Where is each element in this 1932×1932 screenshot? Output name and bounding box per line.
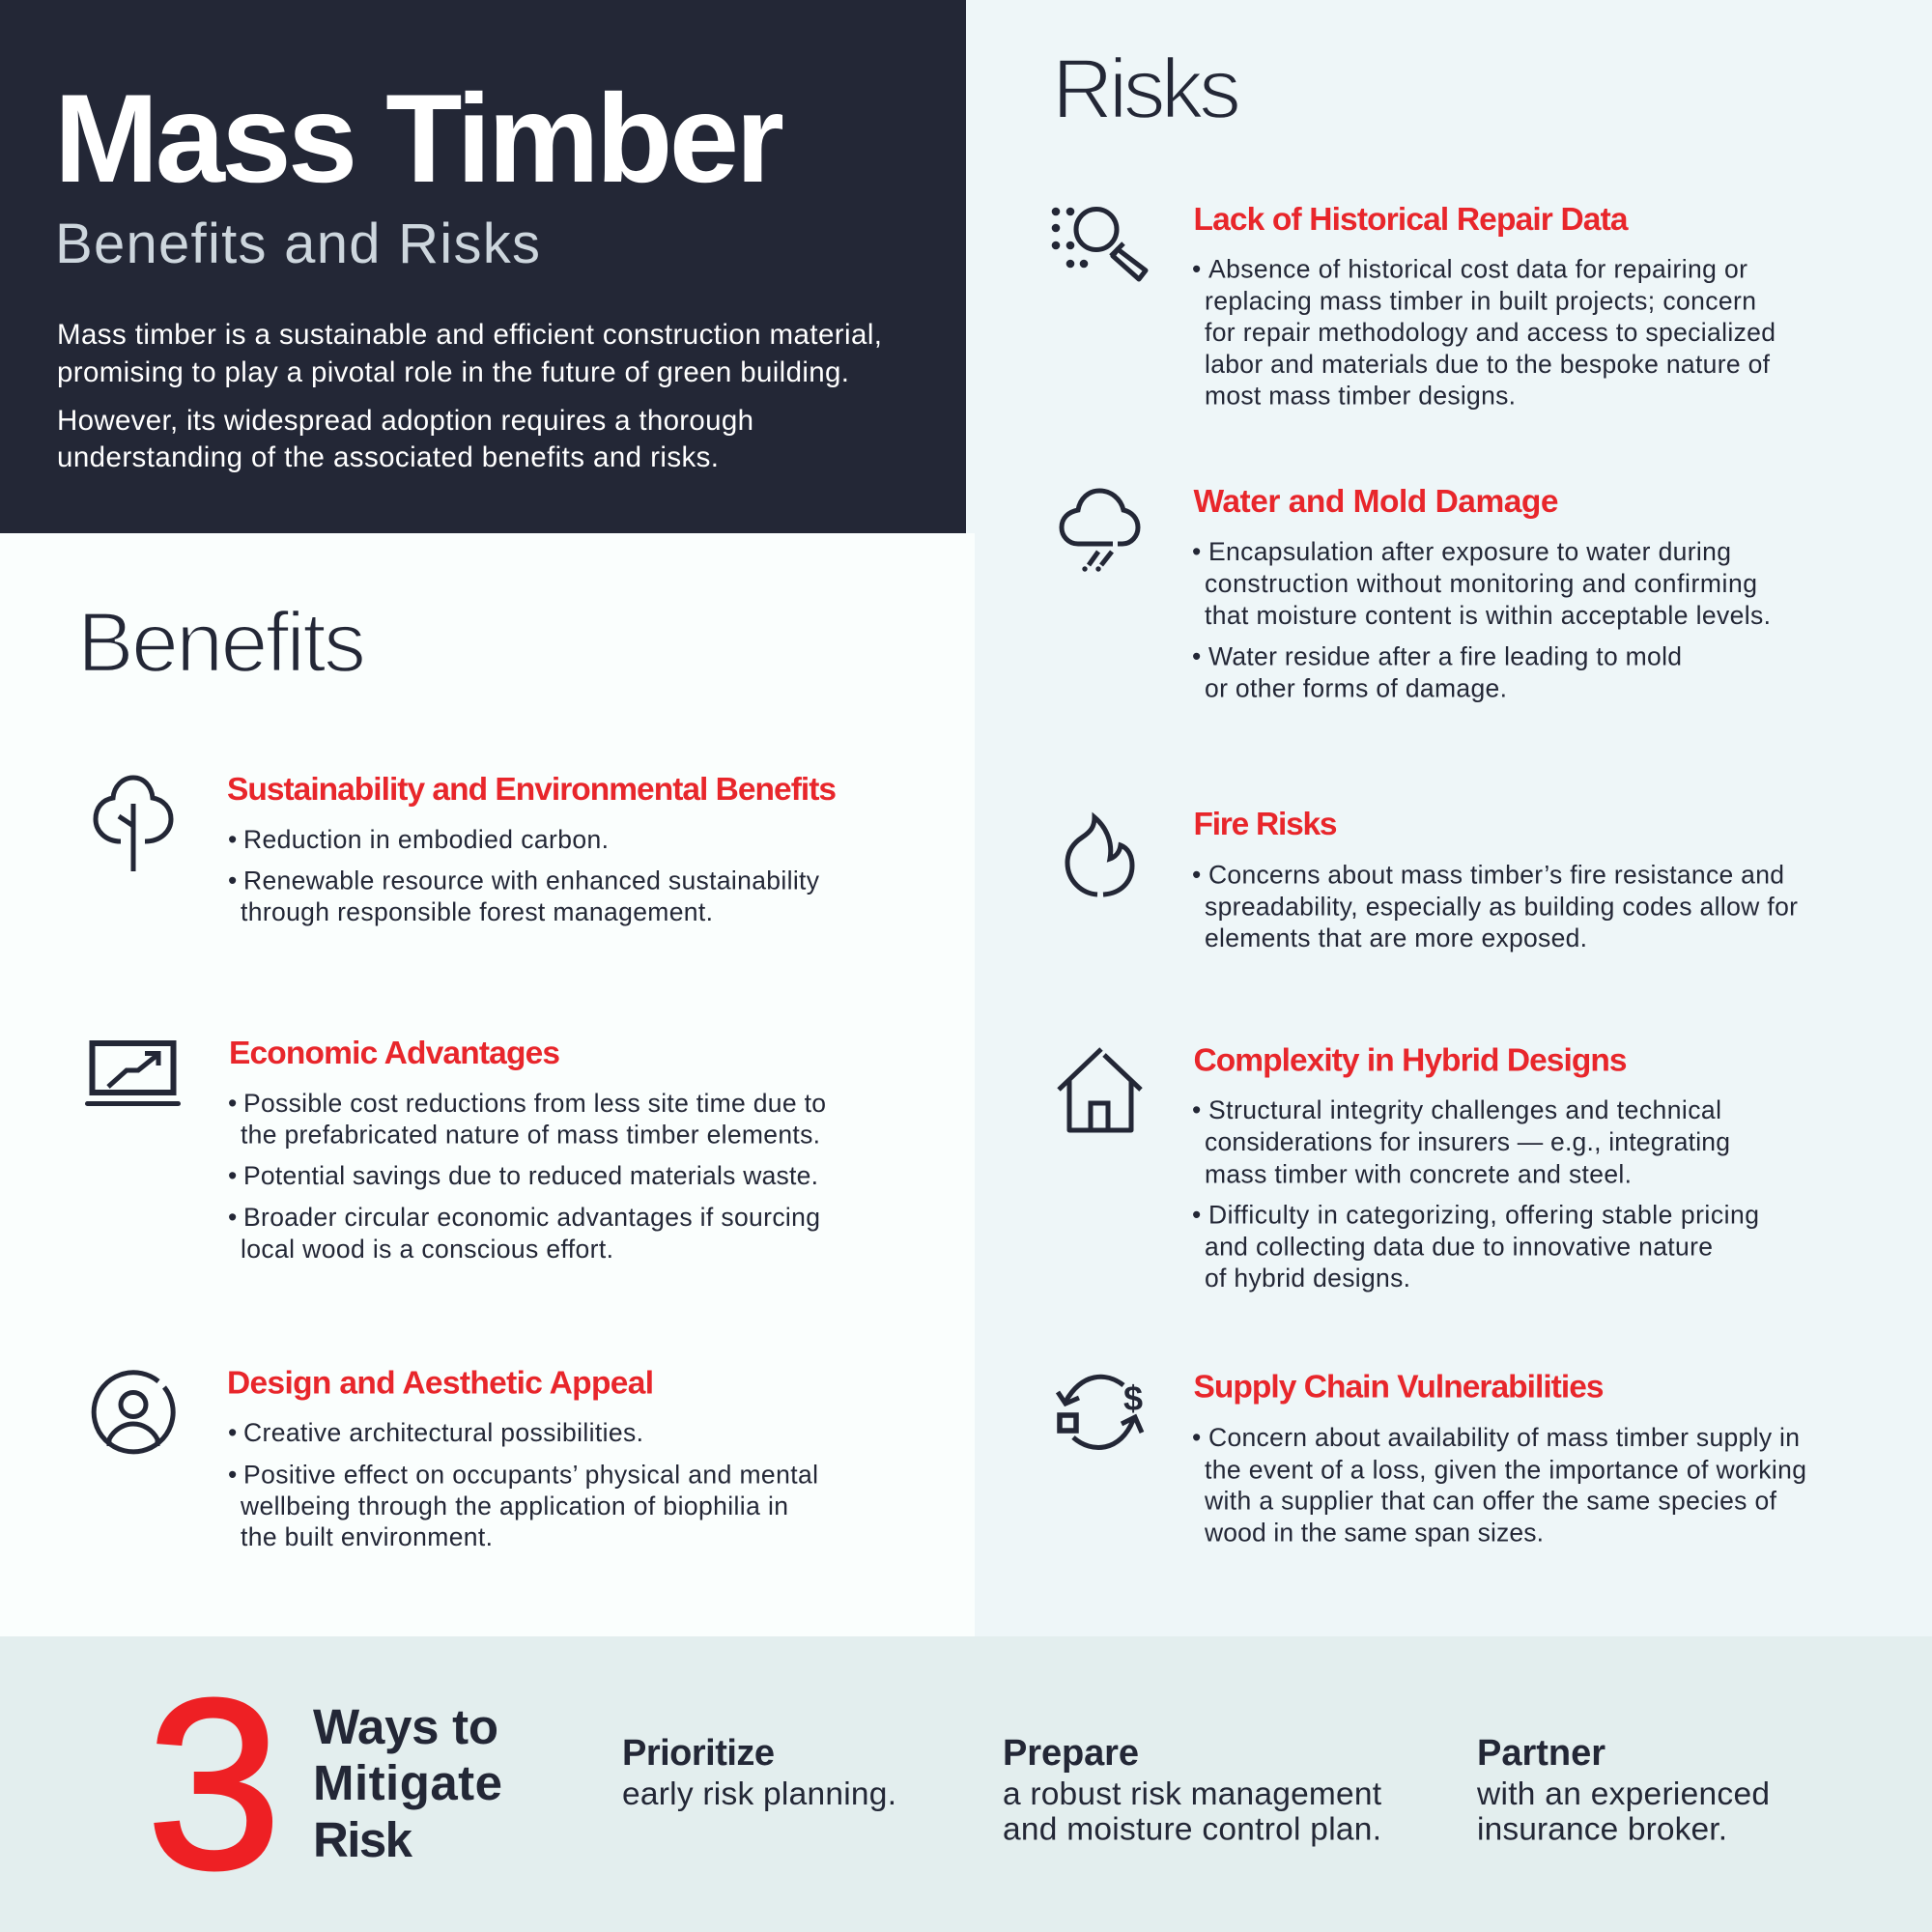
heading: Benefits: Benefits — [77, 594, 366, 690]
body text — [1192, 860, 1798, 952]
body text: • — [228, 1161, 237, 1190]
icon: house — [1059, 1049, 1141, 1130]
body text: considerations for insurers — e.g., integrating — [1205, 1127, 1730, 1156]
intro text: promising to play a pivotal role in the future of green building. — [57, 356, 849, 388]
icon: supply cycle with dollar: $ — [1123, 1378, 1143, 1418]
body text: Water residue after a fire leading to mold — [1208, 641, 1682, 670]
heading: Complexity in Hybrid Designs — [1194, 1043, 1627, 1078]
body text: • — [228, 1418, 237, 1447]
body text: Concerns about mass timber’s fire resistance and — [1208, 860, 1784, 889]
heading: Sustainability and Environmental Benefits — [227, 772, 837, 808]
body text: • — [228, 1203, 237, 1232]
body text: or other forms of damage. — [1205, 674, 1507, 703]
body text: • — [1192, 860, 1201, 889]
body text: • — [228, 866, 237, 895]
body text: • — [228, 1461, 237, 1490]
body text: • — [1192, 1423, 1201, 1452]
body text — [1192, 255, 1776, 410]
body text: Concern about availability of mass timber supply in — [1208, 1423, 1800, 1452]
panel: benefit sustainability — [96, 772, 837, 926]
body text: • — [228, 1089, 237, 1118]
body text: Difficulty in categorizing, offering stable pricing — [1208, 1200, 1759, 1229]
panel: 3 ways to mitigate risk — [0, 1636, 1932, 1932]
big number 3: 3 — [147, 1649, 281, 1918]
panel: risk repair data — [1052, 202, 1776, 410]
heading: Design and Aesthetic Appeal — [227, 1366, 654, 1401]
panel: risk hybrid designs — [1059, 1043, 1759, 1293]
body text — [228, 1418, 818, 1551]
heading: Lack of Historical Repair Data — [1194, 202, 1629, 238]
body text: • — [1192, 1200, 1201, 1229]
body text: Possible cost reductions from less site time due to — [243, 1089, 826, 1118]
way: partner: Partner — [1477, 1733, 1605, 1774]
body text: Broader circular economic advantages if sourcing — [243, 1203, 820, 1232]
body text — [228, 825, 820, 926]
way: prepare: a robust risk management — [1003, 1776, 1382, 1812]
body text: and collecting data due to innovative nature — [1205, 1233, 1713, 1262]
title: Mass Timber — [54, 68, 784, 209]
heading: Supply Chain Vulnerabilities — [1194, 1370, 1604, 1405]
heading: Water and Mold Damage — [1194, 484, 1559, 520]
way: prioritize: Prioritize — [622, 1733, 775, 1774]
panel: risk fire — [1067, 807, 1798, 952]
body text: the event of a loss, given the importance of working — [1205, 1455, 1806, 1484]
body text: elements that are more exposed. — [1205, 923, 1587, 952]
body text: the prefabricated nature of mass timber elements. — [241, 1121, 820, 1150]
section heading: Risk — [313, 1812, 413, 1867]
way: prioritize: early risk planning. — [622, 1776, 896, 1812]
icon: person in circle — [94, 1373, 173, 1452]
body text: Reduction in embodied carbon. — [243, 825, 609, 854]
way: partner — [1476, 1733, 1770, 1847]
body text: • — [228, 825, 237, 854]
section heading: Mitigate — [313, 1755, 502, 1810]
way: prepare: Prepare — [1003, 1733, 1139, 1774]
body text: Potential savings due to reduced materials waste. — [243, 1161, 818, 1190]
body text: wellbeing through the application of biophilia in — [240, 1492, 788, 1520]
icon: magnifier with dots — [1052, 208, 1146, 279]
intro text — [57, 319, 882, 473]
way: partner: with an experienced — [1476, 1776, 1770, 1812]
body text: that moisture content is within acceptable levels. — [1205, 601, 1771, 630]
body text: Structural integrity challenges and technical — [1208, 1095, 1721, 1124]
panel: risk water and mold — [1062, 484, 1771, 703]
icon: rain cloud — [1062, 491, 1138, 572]
body text — [1192, 1095, 1759, 1293]
panel: risk supply chain — [1058, 1370, 1806, 1548]
body text: Encapsulation after exposure to water during — [1208, 537, 1731, 566]
body text — [228, 1089, 826, 1264]
panel: benefit design — [94, 1366, 818, 1551]
body text: Renewable resource with enhanced sustainability — [243, 866, 820, 895]
body text: for repair methodology and access to specialized — [1205, 318, 1776, 347]
body text: replacing mass timber in built projects; concern — [1205, 286, 1756, 315]
icon: flame — [1067, 817, 1132, 895]
body text — [1192, 1423, 1806, 1548]
body text: • — [1192, 1095, 1201, 1124]
body text: wood in the same span sizes. — [1204, 1519, 1544, 1548]
body text: local wood is a conscious effort. — [241, 1235, 613, 1264]
body text: mass timber with concrete and steel. — [1205, 1159, 1632, 1188]
way: partner: insurance broker. — [1477, 1812, 1727, 1847]
section heading — [313, 1699, 502, 1867]
body text: through responsible forest management. — [241, 897, 713, 926]
subtitle: Benefits and Risks — [55, 213, 540, 275]
body text: construction without monitoring and confirming — [1205, 569, 1757, 598]
icon: supply cycle with dollar — [1058, 1377, 1143, 1448]
body text: • — [1192, 255, 1201, 284]
heading: Economic Advantages — [229, 1036, 560, 1071]
intro text: Mass timber is a sustainable and efficient construction material, — [57, 319, 882, 351]
body text: Absence of historical cost data for repairing or — [1208, 255, 1747, 284]
heading: Risks: Risks — [1052, 41, 1241, 136]
body text: most mass timber designs. — [1205, 381, 1516, 410]
body text: spreadability, especially as building codes allow for — [1205, 893, 1798, 922]
body text: • — [1192, 641, 1201, 670]
icon: laptop with growth chart — [87, 1043, 178, 1103]
way: prepare — [1003, 1733, 1382, 1847]
intro text: understanding of the associated benefits and risks. — [57, 441, 719, 473]
body text: labor and materials due to the bespoke nature of — [1205, 350, 1771, 379]
body text: • — [1192, 537, 1201, 566]
way: prepare: and moisture control plan. — [1003, 1812, 1381, 1847]
icon: tree — [96, 778, 171, 871]
header panel — [0, 0, 966, 533]
panel: benefit economic — [87, 1036, 826, 1264]
body text: the built environment. — [241, 1522, 493, 1551]
body text — [1192, 537, 1771, 703]
heading: Fire Risks — [1194, 807, 1337, 842]
body text: Positive effect on occupants’ physical and mental — [243, 1461, 818, 1490]
way: prioritize — [622, 1733, 896, 1812]
body text: of hybrid designs. — [1205, 1264, 1410, 1293]
intro text: However, its widespread adoption requires a thorough — [57, 405, 753, 437]
body text: with a supplier that can offer the same species of — [1204, 1486, 1777, 1515]
body text: Creative architectural possibilities. — [243, 1418, 643, 1447]
section heading: Ways to — [313, 1699, 498, 1754]
